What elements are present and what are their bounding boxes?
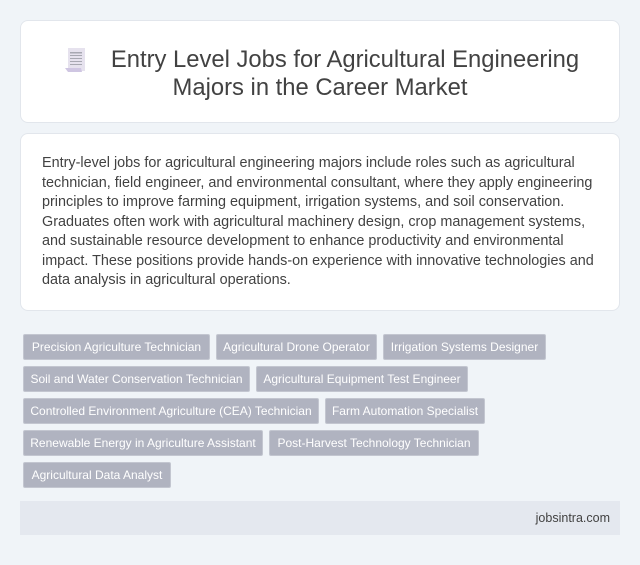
- title: Entry Level Jobs for Agricultural Engineering: [111, 46, 579, 73]
- tag: Agricultural Data Analyst: [32, 468, 162, 482]
- description text: [42, 155, 594, 288]
- tag: Renewable Energy in Agriculture Assistant: [30, 436, 256, 450]
- icon: document scroll: [65, 48, 85, 72]
- tag: [23, 398, 319, 424]
- tag: Agricultural Equipment Test Engineer: [263, 372, 461, 386]
- description text: data analysis in agricultural operations.: [42, 272, 291, 288]
- tag: Soil and Water Conservation Technician: [30, 372, 243, 386]
- tag: Post-Harvest Technology Technician: [278, 436, 470, 450]
- header panel: [20, 20, 620, 123]
- footer bar: [20, 501, 620, 535]
- tag: [256, 366, 468, 392]
- footer source text: jobsintra.com: [536, 511, 610, 525]
- tag: Irrigation Systems Designer: [391, 340, 538, 354]
- tag: [269, 430, 479, 456]
- description text: Graduates often work with agricultural machinery design, crop management systems,: [42, 214, 585, 230]
- tag: Controlled Environment Agriculture (CEA) Technician: [30, 404, 312, 418]
- tag: [216, 334, 377, 360]
- tag: [23, 430, 263, 456]
- tag: [23, 366, 250, 392]
- tag: Precision Agriculture Technician: [32, 340, 201, 354]
- tag: [23, 334, 210, 360]
- tag: Farm Automation Specialist: [332, 404, 478, 418]
- tag: [325, 398, 485, 424]
- description text: technician, field engineer, and environmental consultant, where they apply engineering: [42, 175, 592, 191]
- tag: [383, 334, 546, 360]
- tag: [23, 462, 171, 488]
- description text: Entry-level jobs for agricultural engineering majors include roles such as agricultural: [42, 155, 575, 171]
- description text: impact. These positions provide hands-on experience with innovative technologies and: [42, 253, 594, 269]
- tag: Agricultural Drone Operator: [223, 340, 370, 354]
- title: Majors in the Career Market: [173, 74, 467, 101]
- description text: principles to improve farming equipment, irrigation systems, and soil conservation.: [42, 194, 564, 210]
- title: [111, 46, 579, 101]
- tag list: [23, 334, 546, 488]
- description panel: [20, 133, 620, 311]
- description text: and sustainable resource development to enhance productivity and environmental: [42, 233, 564, 249]
